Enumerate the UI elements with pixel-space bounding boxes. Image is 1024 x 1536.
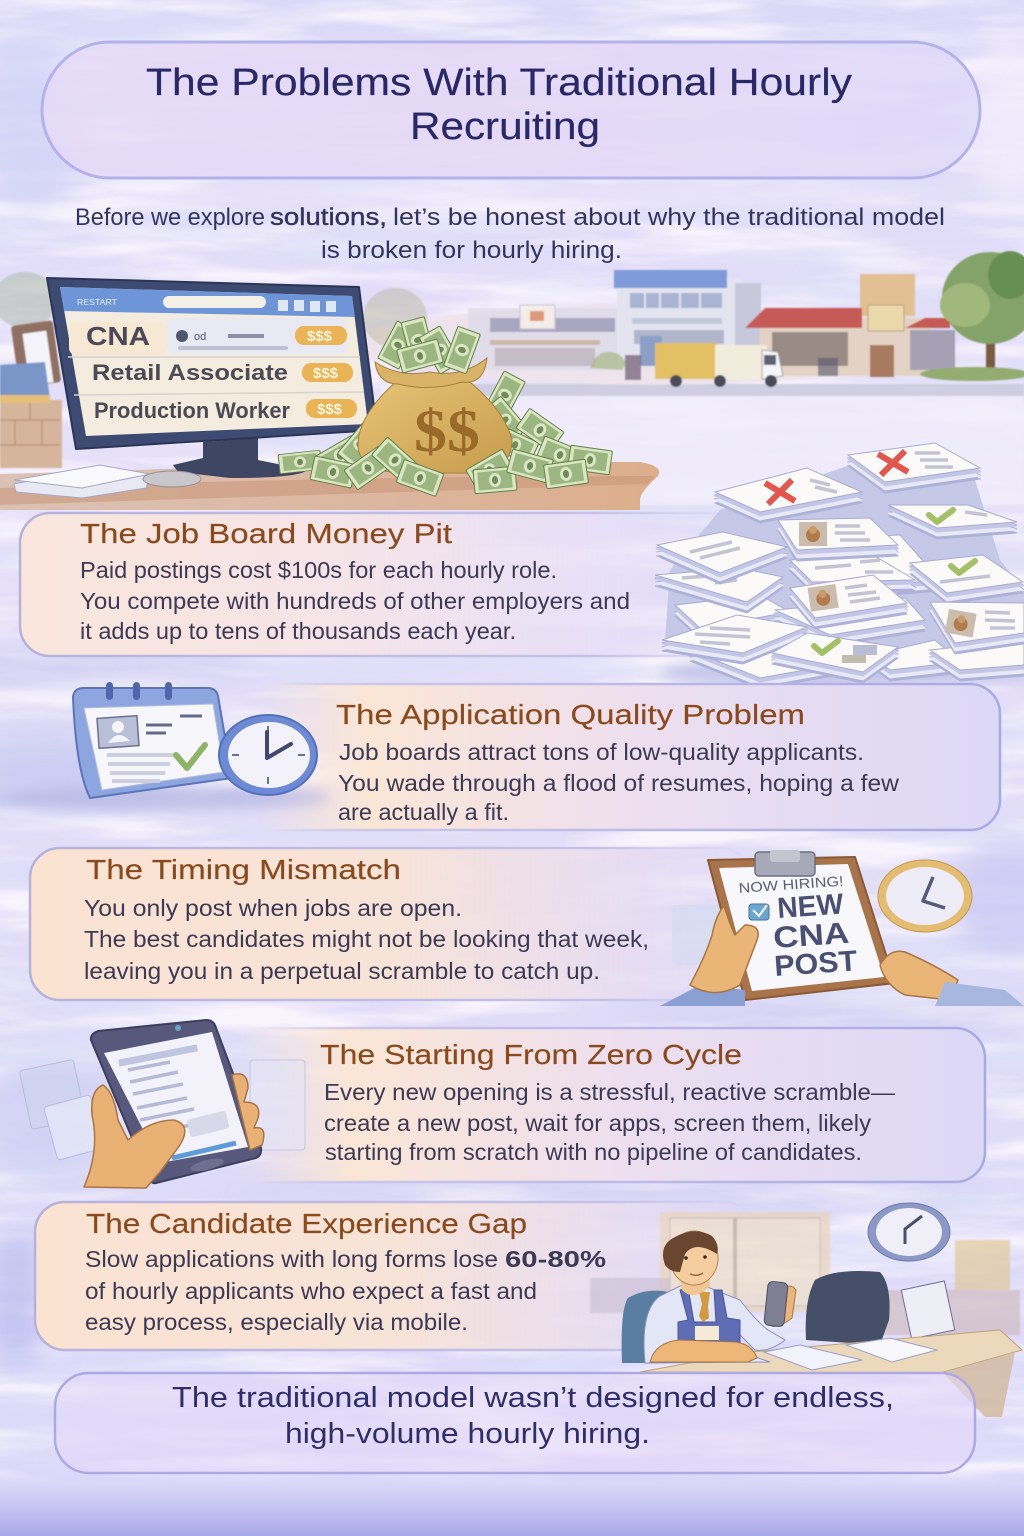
CNA row: $$$	[307, 328, 333, 345]
scattered cash	[278, 371, 612, 477]
callout text	[172, 1382, 894, 1450]
resume with photo 3	[790, 575, 907, 618]
panel: timing mismatch	[30, 848, 750, 1000]
clipboard	[708, 850, 895, 1000]
monitor stand	[173, 438, 307, 478]
desk paperwork	[764, 1345, 862, 1370]
heading: The Timing Mismatch	[86, 854, 401, 885]
intro text: is broken for hourly hiring.	[321, 237, 622, 264]
Production Worker row	[74, 392, 364, 423]
body text: Slow applications with long forms lose	[85, 1246, 498, 1272]
desk papers and mouse	[14, 465, 201, 498]
resume bottom left	[662, 615, 807, 653]
tree right	[920, 251, 1024, 381]
clipboard: POST	[773, 945, 859, 983]
body text: You only post when jobs are open.	[84, 895, 462, 921]
faded resume behind	[672, 905, 720, 965]
CNA row: od	[194, 331, 206, 343]
body text: You wade through a flood of resumes, hoping a few	[338, 770, 899, 796]
body text: are actually a fit.	[338, 799, 509, 825]
panel: job board money pit	[20, 513, 740, 656]
callout text: The traditional model wasn’t designed for endless,	[172, 1382, 894, 1414]
heading: The Candidate Experience Gap	[86, 1208, 527, 1239]
callout text: high-volume hourly hiring.	[285, 1418, 650, 1450]
body text	[324, 1079, 895, 1165]
computer monitor with job listings	[47, 278, 377, 478]
resume with red cross top	[848, 443, 980, 482]
resume with check bottom	[772, 633, 898, 672]
calendar	[73, 682, 232, 798]
body text: it adds up to tens of thousands each year.	[80, 618, 516, 644]
body text: easy process, especially via mobile.	[85, 1309, 468, 1335]
hand	[84, 1074, 264, 1188]
money bag with scattered cash	[278, 317, 612, 496]
Production Worker row: $$$	[317, 401, 343, 418]
money bag with scattered cash: $$	[414, 398, 480, 464]
title text	[146, 62, 852, 148]
building: red awning shop	[745, 274, 955, 377]
body text: leaving you in a perpetual scramble to catch up.	[84, 958, 600, 984]
clipboard: NOW HIRING!	[738, 873, 844, 896]
resume 7	[790, 555, 915, 582]
building: left low office	[468, 305, 618, 370]
illustration: employee at desk with phone	[590, 1203, 1022, 1417]
delivery truck	[625, 343, 838, 387]
lower stacked layers	[665, 465, 1024, 680]
building: tall blue-roof	[614, 270, 761, 366]
person	[622, 1231, 796, 1363]
forearm and hand on desk	[650, 1340, 757, 1362]
computer monitor with job listings: RESTART	[77, 298, 117, 307]
resume 6 blob	[655, 568, 783, 602]
document on rack	[901, 1281, 955, 1339]
intro text	[75, 204, 945, 264]
panel: starting from zero cycle	[195, 1028, 985, 1182]
intro text: Before we explore	[75, 204, 265, 231]
browser header	[60, 287, 355, 317]
hero illustration: town scene behind desk	[0, 251, 1024, 505]
resume with photo 2	[778, 518, 898, 550]
office background	[590, 1212, 1020, 1335]
clipboard: CNA	[772, 917, 850, 955]
resume with check	[910, 555, 1023, 593]
heading: The Application Quality Problem	[336, 699, 805, 730]
Retail Associate row: Retail Associate	[92, 360, 288, 385]
panel: application quality problem	[210, 684, 1000, 830]
title text: Recruiting	[410, 106, 600, 148]
icon: hand holding phone	[19, 1020, 305, 1188]
hands and sleeves	[660, 906, 1024, 1006]
heading: The Job Board Money Pit	[80, 518, 452, 549]
Retail Associate row: $$$	[313, 365, 339, 382]
body text	[80, 557, 630, 644]
desk	[640, 1330, 1022, 1373]
phone	[91, 1020, 261, 1183]
resume with red cross left	[715, 468, 862, 512]
body text: You compete with hundreds of other employers and	[80, 588, 630, 614]
resume with check top right	[888, 505, 1017, 528]
footer callout pill	[55, 1373, 975, 1473]
faded trees behind monitor	[0, 272, 427, 348]
resume with photo 4	[930, 602, 1024, 643]
heading: The Starting From Zero Cycle	[320, 1039, 742, 1070]
CNA row: CNA	[86, 321, 150, 351]
icon: pile of resumes	[655, 443, 1024, 686]
title text: The Problems With Traditional Hourly	[146, 62, 852, 104]
body text: create a new post, wait for apps, screen them, likely	[324, 1110, 872, 1136]
bills in sack	[378, 317, 480, 374]
clock	[219, 715, 317, 795]
Production Worker row: Production Worker	[94, 398, 290, 423]
CNA row	[69, 318, 347, 355]
body text: Job boards attract tons of low-quality applicants.	[339, 739, 864, 765]
intro text: solutions,	[270, 204, 387, 231]
clipboard: NEW	[776, 888, 845, 925]
icon: calendar and clock	[0, 682, 330, 810]
body text: Every new opening is a stressful, reactive scramble—	[324, 1079, 895, 1105]
Retail Associate row	[68, 357, 360, 385]
body text: The best candidates might not be looking that week,	[84, 926, 649, 952]
office chair	[806, 1271, 890, 1345]
body text: starting from scratch with no pipeline of candidates.	[325, 1139, 862, 1165]
title pill	[42, 42, 980, 178]
body text	[338, 739, 899, 825]
wall clock	[868, 1203, 950, 1261]
body text: of hourly applicants who expect a fast and	[85, 1278, 537, 1304]
left background clutter	[0, 320, 62, 468]
icon: now hiring clipboard held in hands	[660, 850, 1024, 1006]
resume 5	[657, 532, 787, 573]
body text: 60-80%	[505, 1246, 606, 1272]
body text	[85, 1246, 606, 1335]
wall clock	[878, 860, 972, 932]
body text	[84, 895, 649, 984]
desk	[0, 462, 659, 510]
background papers	[19, 1059, 305, 1160]
panel: candidate experience gap	[35, 1202, 755, 1350]
intro text: let’s be honest about why the traditional model	[393, 204, 945, 231]
body text: Paid postings cost $100s for each hourly role.	[80, 557, 557, 583]
sack	[358, 378, 512, 473]
front cash	[310, 437, 588, 496]
